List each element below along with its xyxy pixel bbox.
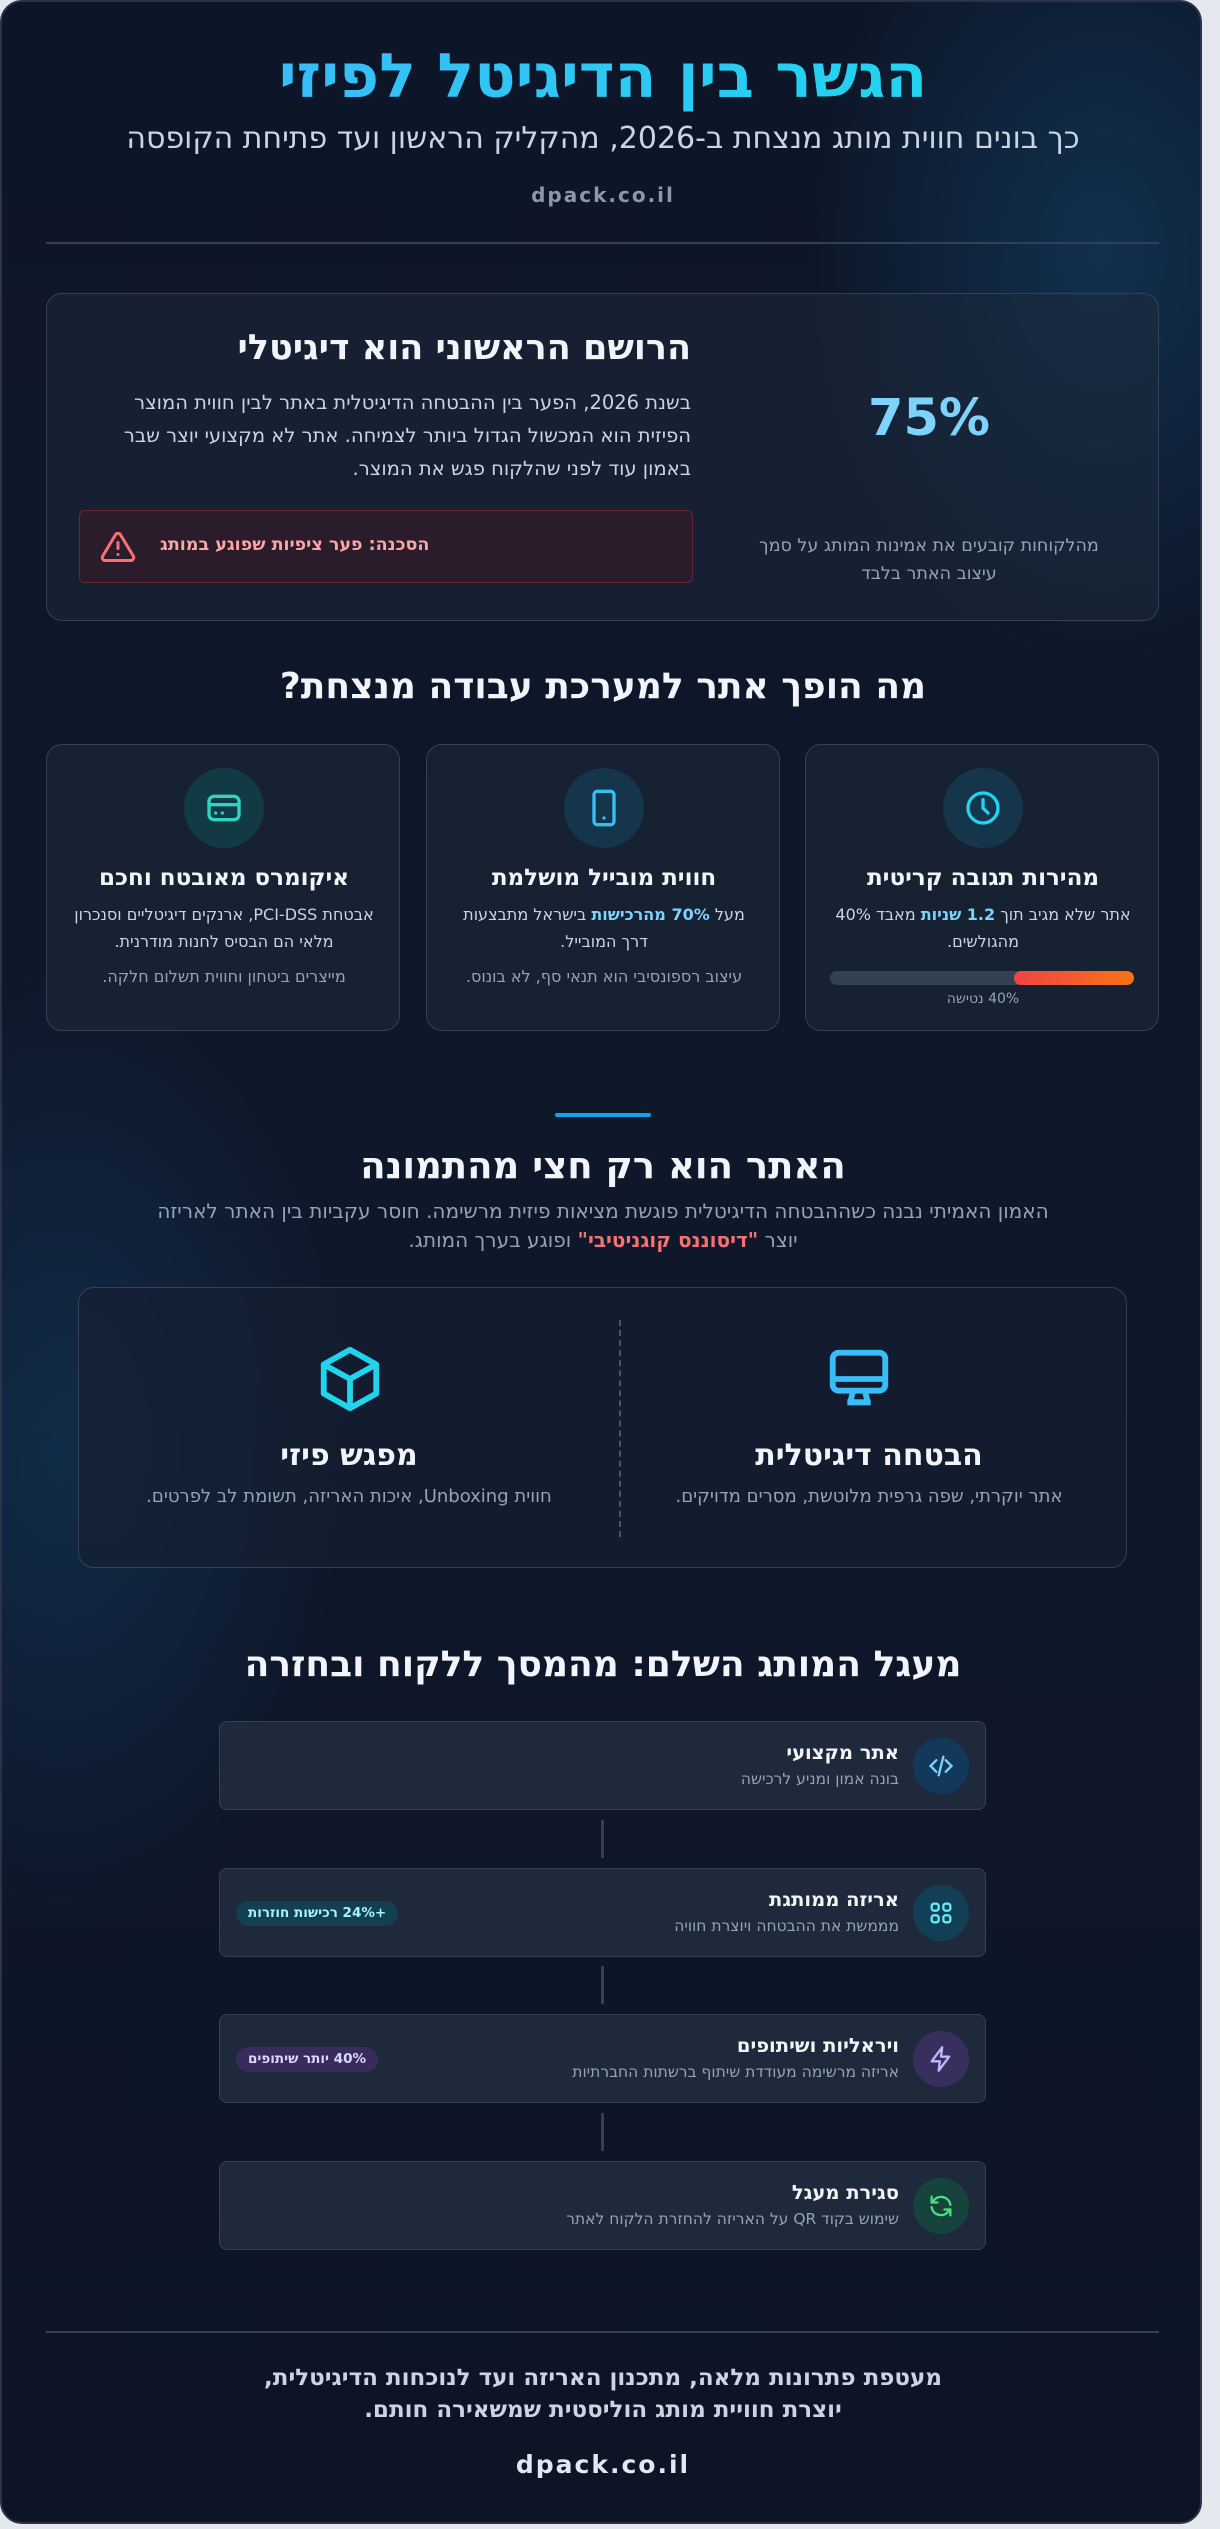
icon: clock — [943, 768, 1023, 848]
bar label: 40% נטישה — [947, 991, 1019, 1007]
icon: monitor — [830, 1350, 888, 1406]
digital title: הבטחה דיגיטלית — [755, 1438, 983, 1473]
icon: grid — [913, 1885, 969, 1941]
step: packaging — [219, 1868, 986, 1957]
alert text: הסכנה: פער ציפיות שפוגע במותג — [160, 535, 429, 555]
icon: warning — [100, 532, 136, 562]
card text: אבטחת PCI-DSS, ארנקים דיגיטליים וסנכרון מלאי הם הבסיס לחנות מודרנית. — [74, 905, 374, 951]
icon: bolt — [913, 2031, 969, 2087]
step: website: אתר מקצועי — [786, 1741, 899, 1764]
card text: מעל 70% מהרכישות בישראל מתבצעות דרך המובייל. — [463, 905, 745, 951]
step: viral — [219, 2014, 986, 2103]
step: packaging: אריזה ממותגת — [769, 1888, 899, 1911]
alert box — [79, 510, 693, 583]
physical title: מפגש פיזי — [280, 1438, 418, 1473]
heading: הרושם הראשוני הוא דיגיטלי — [237, 328, 691, 368]
icon: box — [320, 1346, 380, 1412]
step: website — [219, 1721, 986, 1810]
panel: ecommerce — [46, 744, 400, 1031]
step: viral: ויראליות ושיתופים — [737, 2034, 899, 2057]
icon: phone — [564, 768, 644, 848]
stat 75%: 75% — [868, 389, 990, 448]
panel: speed — [805, 744, 1159, 1031]
card note: מייצרים ביטחון וחווית תשלום חלקה. — [102, 967, 346, 986]
step: closing the loop: שימוש בקוד QR על האריזה להחזרת הלקוח לאתר — [566, 2210, 899, 2228]
subtitle: כך בונים חווית מותג מנצחת ב-2026, מהקליק הראשון ועד פתיחת הקופסה — [126, 121, 1080, 156]
footer text: מעטפת פתרונות מלאה, מתכנון האריזה ועד לנוכחות הדיגיטלית, — [264, 2365, 942, 2391]
panel: mobile — [426, 744, 780, 1031]
panel: digital vs physical — [78, 1287, 1127, 1568]
panel: first impression — [46, 293, 1159, 621]
site url: dpack.co.il — [531, 183, 675, 207]
footer url: dpack.co.il — [516, 2450, 690, 2479]
badge — [236, 2047, 378, 2072]
footer text: יוצרת חוויית מותג הוליסטית שמשאירה חותם. — [364, 2397, 842, 2423]
physical text: חווית Unboxing, איכות האריזה, תשומת לב לפרטים. — [146, 1486, 552, 1507]
section heading: half the picture: האתר הוא רק חצי מהתמונה — [360, 1144, 846, 1187]
step: closing the loop — [219, 2161, 986, 2250]
footer text — [264, 2365, 942, 2423]
card title: מהירות תגובה קריטית — [867, 865, 1099, 891]
icon: code — [913, 1738, 969, 1794]
icon: refresh — [913, 2178, 969, 2234]
card text: אתר שלא מגיב תוך 1.2 שניות מאבד 40% מהגולשים. — [835, 905, 1131, 951]
step: website: בונה אמון ומניע לרכישה — [741, 1770, 899, 1788]
badge — [236, 1901, 398, 1926]
stat caption: מהלקוחות קובעים את אמינות המותג על סמך עיצוב האתר בלבד — [759, 536, 1099, 584]
bar chart: bounce — [830, 971, 1134, 985]
badge: 40% יותר שיתופים — [248, 2051, 366, 2067]
section heading: winning system: מה הופך אתר למערכת עבודה מנצחת? — [280, 666, 926, 707]
paragraph: בשנת 2026, הפער בין ההבטחה הדיגיטלית באתר לבין חווית המוצר הפיזית הוא המכשול הגדול ביותר לצמיחה. אתר לא מקצועי יוצר שבר באמון עוד לפני שהלקוח פגש את המוצר. — [124, 391, 691, 480]
digital text: אתר יוקרתי, שפה גרפית מלוטשת, מסרים מדויקים. — [675, 1486, 1063, 1507]
section text: האמון האמיתי נבנה כשההבטחה הדיגיטלית פוגשת מציאות פיזית מרשימה. חוסר עקביות בין האתר לאריזה יוצר "דיסוננס קוגניטיבי" ופוגע בערך המותג. — [157, 1199, 1049, 1252]
icon: credit card — [184, 768, 264, 848]
card note: עיצוב רספונסיבי הוא תנאי סף, לא בונוס. — [466, 967, 742, 986]
section heading: brand cycle: מעגל המותג השלם: מהמסך ללקוח ובחזרה — [245, 1644, 961, 1685]
badge: +24% רכישות חוזרות — [248, 1905, 386, 1921]
step: packaging: מממשת את ההבטחה ויוצרת חוויה — [674, 1917, 899, 1935]
card title: איקומרס מאובטח וחכם — [99, 865, 349, 891]
step: closing the loop: סגירת מעגל — [792, 2181, 899, 2204]
title: הגשר בין הדיגיטל לפיזי — [279, 41, 927, 112]
card title: חווית מובייל מושלמת — [492, 865, 716, 891]
step: viral: אריזה מרשימה מעודדת שיתוף ברשתות החברתיות — [572, 2063, 899, 2081]
